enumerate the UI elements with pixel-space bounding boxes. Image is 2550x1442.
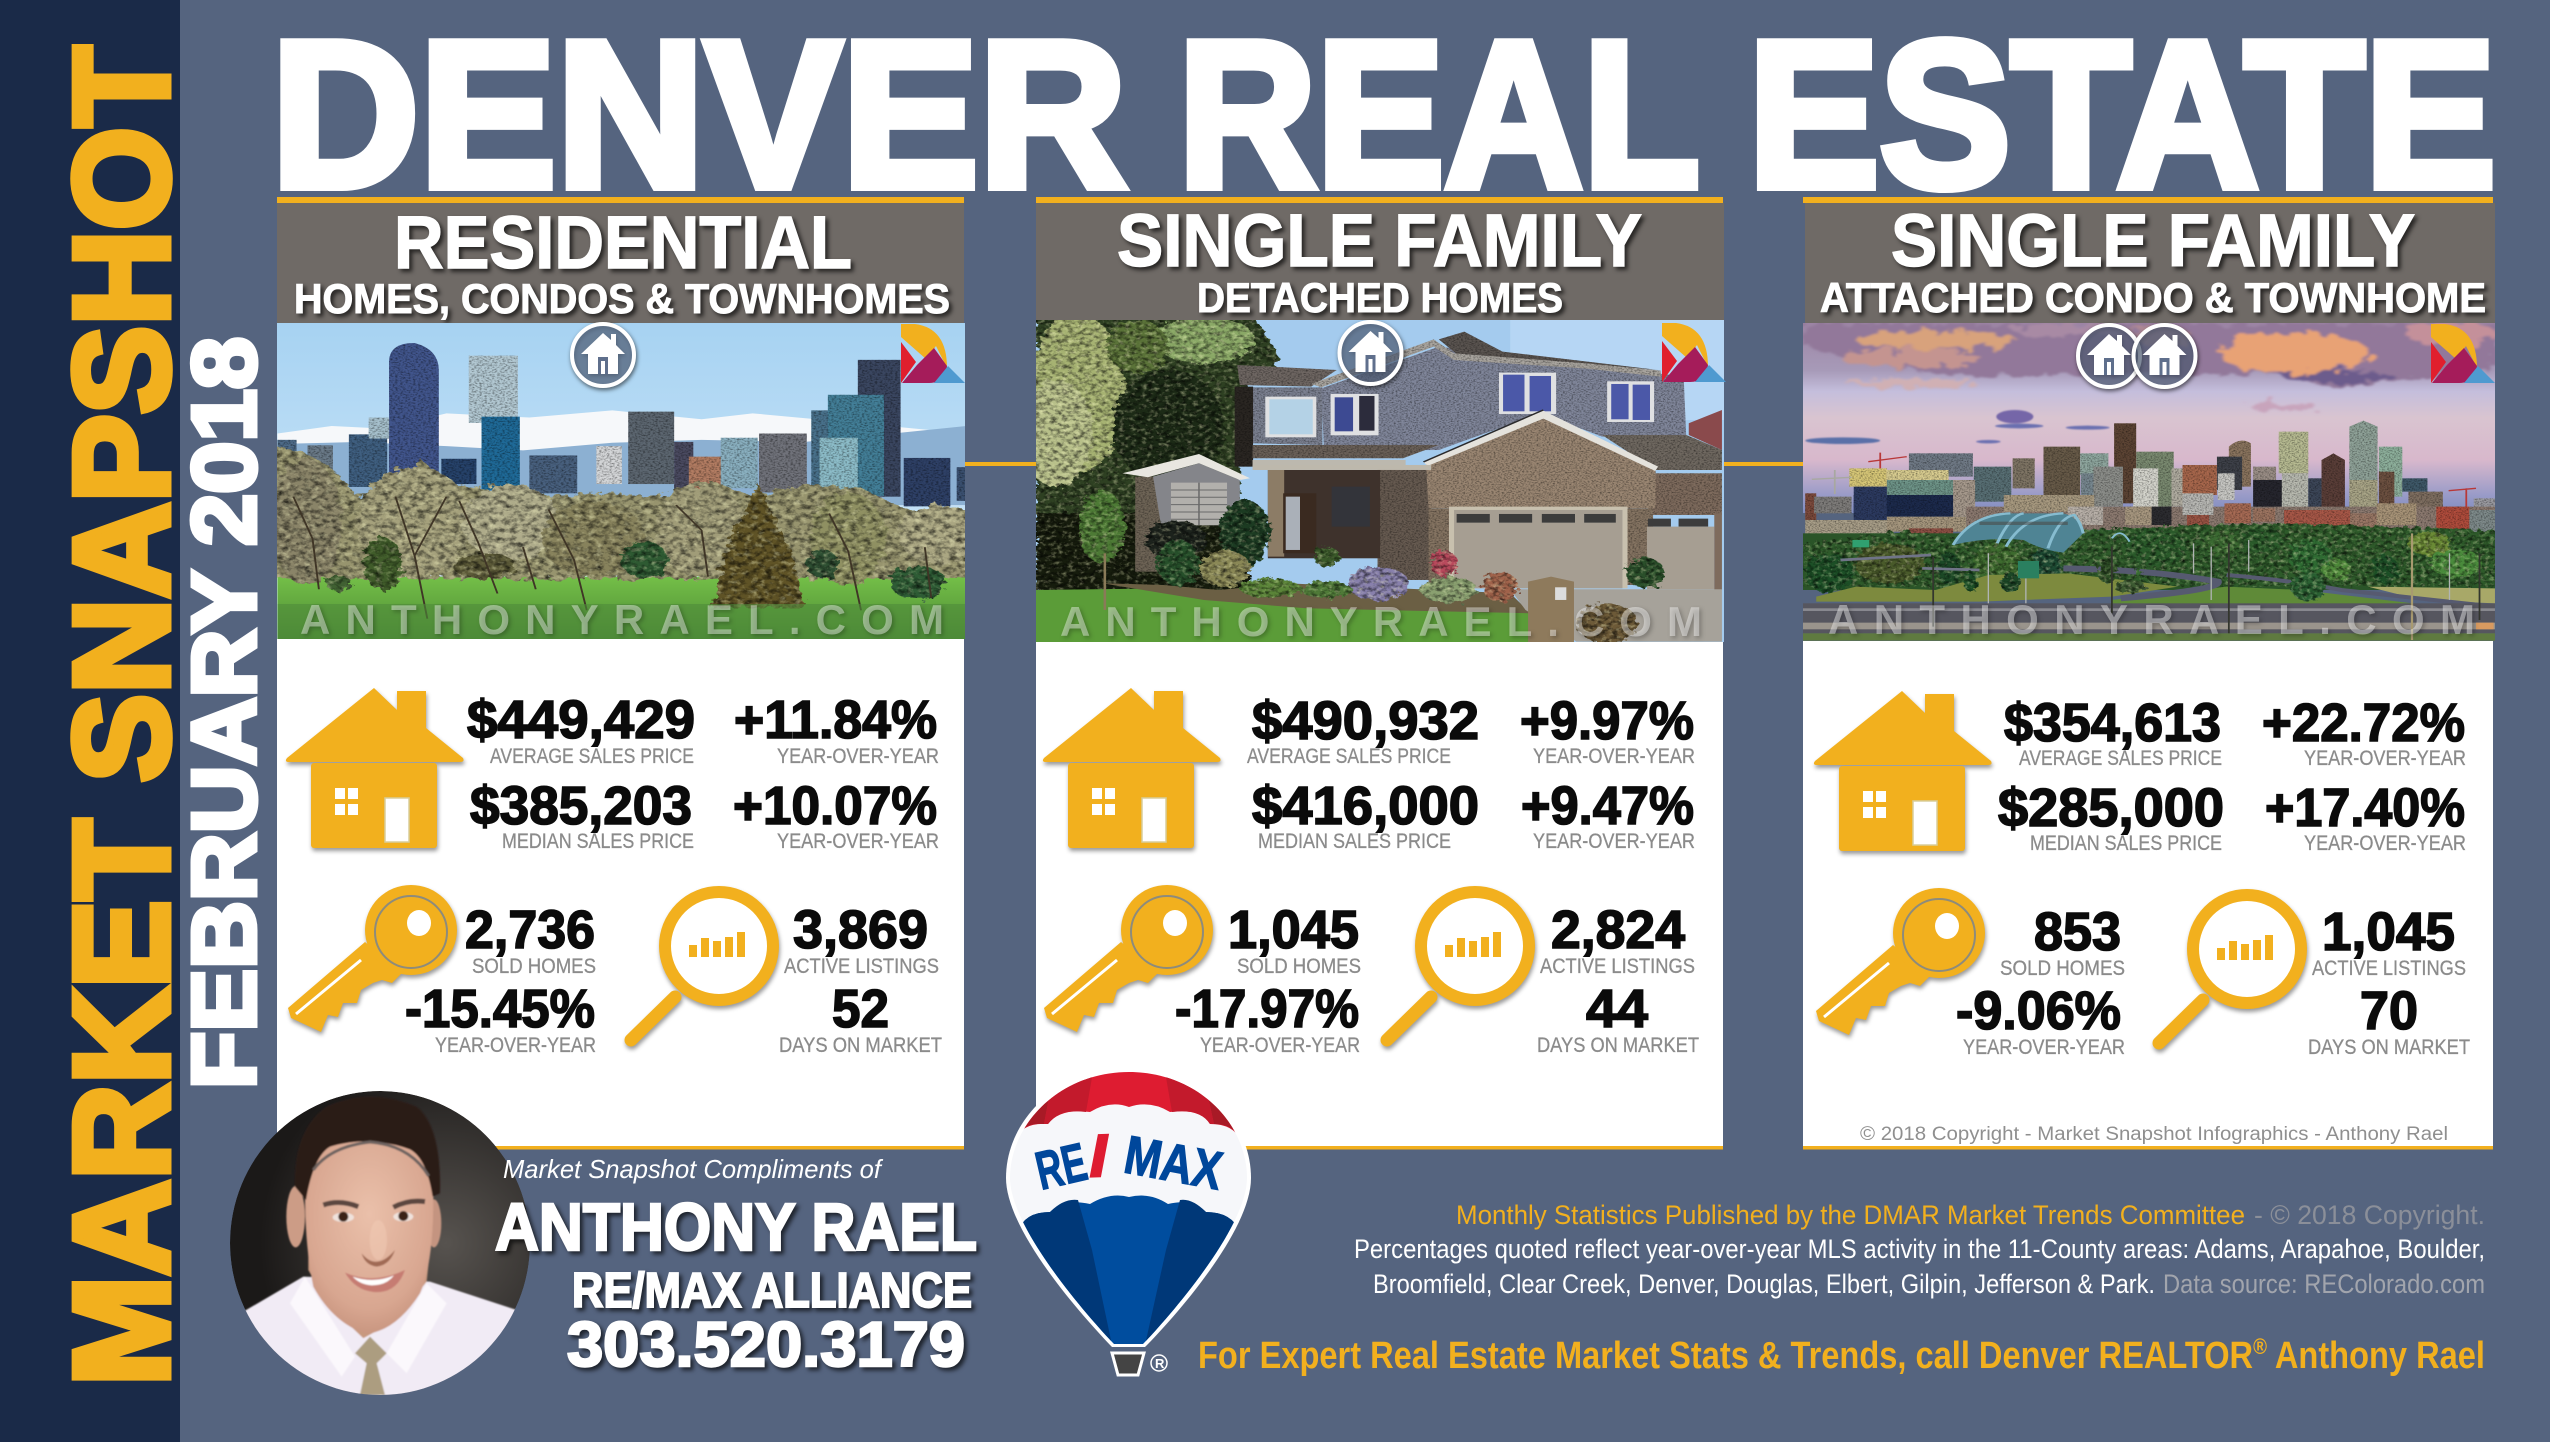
- stat: sold homes: 2,736: [465, 900, 595, 960]
- footer note: source: Monthly Statistics Published by the DMAR Market Trends Committee: [1456, 1200, 2245, 1230]
- brokerage: RE/MAX ALLIANCE: [572, 1264, 972, 1318]
- footer note: source: [1354, 1200, 2485, 1299]
- watermark: ANTHONYRAEL.COM: [1060, 598, 1702, 645]
- stat: sold homes: SOLD HOMES: [472, 954, 596, 978]
- stat: average sales price: $449,429: [467, 690, 695, 750]
- main title: DENVER: [271, 0, 1127, 232]
- stat: active listings: 44: [1586, 979, 1648, 1039]
- balloon wordmark: /: [1089, 1126, 1109, 1187]
- stat: sold homes: -15.45%: [405, 979, 595, 1039]
- photo: detached house: [1020, 313, 1724, 645]
- agent name: ANTHONY RAEL: [495, 1190, 977, 1265]
- stat: sold homes: 1,045: [1228, 900, 1359, 960]
- panel heading: single family attached: ATTACHED CONDO & TOWNHOME: [1820, 274, 2486, 321]
- watermark: ANTHONYRAEL.COM: [1828, 596, 2475, 643]
- stat: sold homes: SOLD HOMES: [1237, 954, 1361, 978]
- stat: median sales price: YEAR-OVER-YEAR: [2304, 831, 2466, 855]
- stat: average sales price: $490,932: [1252, 691, 1479, 751]
- panel: single family detached: [1020, 197, 1726, 1150]
- photo: denver skyline at dusk: [1803, 321, 2498, 643]
- panel heading: single family attached: SINGLE FAMILY: [1891, 199, 2415, 282]
- panel heading: single family detached: DETACHED HOMES: [1197, 274, 1563, 321]
- stat: average sales price: AVERAGE SALES PRICE: [2019, 746, 2222, 770]
- stat: average sales price: [2004, 693, 2466, 770]
- phone number: 303.520.3179: [567, 1310, 965, 1380]
- icon: brand logo: [901, 324, 965, 383]
- panel heading: residential: RESIDENTIAL: [394, 201, 852, 284]
- main title: [271, 0, 2496, 232]
- panel heading: residential: HOMES, CONDOS & TOWNHOMES: [294, 275, 950, 322]
- stat: active listings: 3,869: [793, 900, 928, 960]
- sidebar: [0, 0, 180, 1442]
- stat: average sales price: [467, 690, 939, 768]
- stat: active listings: 1,045: [2322, 902, 2455, 962]
- icon: house: [1043, 688, 1221, 848]
- compliments line: Market Snapshot Compliments of: [503, 1154, 884, 1184]
- agent name: [495, 1190, 977, 1380]
- balloon wordmark: RE: [1030, 1132, 1092, 1202]
- icon: key: [288, 885, 457, 1032]
- panel heading: residential: [294, 201, 950, 322]
- stat: median sales price: MEDIAN SALES PRICE: [1258, 829, 1451, 853]
- stat: active listings: [2308, 902, 2470, 1059]
- icon: key: [1044, 885, 1213, 1032]
- sidebar date: FEBRUARY 2018: [175, 337, 275, 1089]
- icon: two house badges: [2078, 325, 2196, 387]
- icon: magnifier: [1387, 892, 1529, 1040]
- stat: average sales price: YEAR-OVER-YEAR: [1533, 744, 1695, 768]
- stat: active listings: DAYS ON MARKET: [2308, 1035, 2470, 1059]
- stat: median sales price: +10.07%: [733, 776, 937, 836]
- stat: median sales price: MEDIAN SALES PRICE: [2030, 831, 2222, 855]
- stat: median sales price: [1252, 776, 1695, 853]
- stat: median sales price: MEDIAN SALES PRICE: [502, 829, 694, 853]
- stat: sold homes: YEAR-OVER-YEAR: [1963, 1035, 2125, 1059]
- stat: sold homes: SOLD HOMES: [2000, 956, 2125, 980]
- balloon wordmark: MAX: [1120, 1125, 1227, 1202]
- stat: sold homes: [405, 900, 596, 1057]
- panel: single family attached: [1803, 197, 2498, 1150]
- footer note: source: Data source: REColorado.com: [2163, 1269, 2485, 1299]
- stat: median sales price: YEAR-OVER-YEAR: [777, 829, 939, 853]
- stat: sold homes: YEAR-OVER-YEAR: [1200, 1033, 1360, 1057]
- stat: active listings: 2,824: [1551, 900, 1685, 960]
- agent portrait: [230, 1091, 530, 1403]
- photo: denver skyline with park: [268, 320, 976, 644]
- icon: house: [286, 688, 464, 848]
- icon: house badge: [572, 324, 634, 386]
- stat: active listings: 70: [2360, 981, 2418, 1041]
- stat: average sales price: YEAR-OVER-YEAR: [777, 744, 939, 768]
- stat: average sales price: +11.84%: [734, 690, 937, 750]
- icon: house: [1814, 691, 1992, 851]
- stat: median sales price: [470, 776, 939, 853]
- stat: median sales price: +17.40%: [2265, 778, 2465, 838]
- stat: median sales price: YEAR-OVER-YEAR: [1533, 829, 1695, 853]
- main title: REAL: [1178, 0, 1700, 232]
- stat: active listings: DAYS ON MARKET: [779, 1033, 942, 1057]
- stat: median sales price: [1998, 778, 2466, 855]
- stat: active listings: ACTIVE LISTINGS: [1540, 954, 1695, 978]
- stat: sold homes: -17.97%: [1175, 979, 1359, 1039]
- icon: magnifier: [631, 892, 773, 1040]
- stat: average sales price: +9.97%: [1520, 691, 1694, 751]
- panel: residential: [268, 197, 976, 1150]
- stat: active listings: ACTIVE LISTINGS: [2312, 956, 2466, 980]
- icon: magnifier: [2159, 895, 2301, 1043]
- stat: active listings: [1537, 900, 1699, 1057]
- main title: ESTATE: [1748, 0, 2496, 232]
- copyright line: © 2018 Copyright - Market Snapshot Infographics - Anthony Rael: [1860, 1124, 2448, 1145]
- call to action: For Expert Real Estate Market Stats & Trends, call Denver REALTOR: [1198, 1335, 2428, 1377]
- icon: key: [1816, 888, 1985, 1035]
- sidebar title: market snapshot: MARKET SNAPSHOT: [46, 46, 197, 1386]
- stat: active listings: DAYS ON MARKET: [1537, 1033, 1699, 1057]
- icon: house badge: [1340, 322, 1402, 384]
- stat: median sales price: $385,203: [470, 776, 692, 836]
- icon: re/max balloon: R: [1155, 1356, 1165, 1371]
- connector lines: [964, 462, 1803, 466]
- stat: sold homes: -9.06%: [1956, 981, 2121, 1041]
- stat: sold homes: 853: [2034, 902, 2121, 962]
- stat: sold homes: [1956, 902, 2125, 1059]
- stat: average sales price: YEAR-OVER-YEAR: [2304, 746, 2466, 770]
- stat: active listings: ACTIVE LISTINGS: [784, 954, 939, 978]
- stat: sold homes: [1175, 900, 1361, 1057]
- footer note: source: - © 2018 Copyright.: [2254, 1200, 2485, 1230]
- watermark: ANTHONYRAEL.COM: [300, 596, 944, 643]
- panel heading: single family detached: [1117, 199, 1642, 321]
- call to action: ®: [2253, 1334, 2267, 1359]
- panel heading: single family detached: SINGLE FAMILY: [1117, 199, 1642, 282]
- stat: average sales price: [1247, 691, 1695, 768]
- icon: brand logo: [1662, 323, 1726, 382]
- balloon wordmark: [1030, 1125, 1227, 1202]
- stat: median sales price: $416,000: [1252, 776, 1479, 836]
- footer note: source: Broomfield, Clear Creek, Denver, Douglas, Elbert, Gilpin, Jefferson & Park.: [1373, 1269, 2155, 1299]
- stat: median sales price: +9.47%: [1521, 776, 1694, 836]
- stat: average sales price: AVERAGE SALES PRICE: [490, 744, 694, 768]
- stat: active listings: [779, 900, 942, 1057]
- stat: average sales price: +22.72%: [2262, 693, 2465, 753]
- stat: average sales price: AVERAGE SALES PRICE: [1247, 744, 1451, 768]
- stat: median sales price: $285,000: [1998, 778, 2224, 838]
- stat: average sales price: $354,613: [2004, 693, 2221, 753]
- panel heading: single family attached: [1820, 199, 2486, 321]
- call to action: Anthony Rael: [2267, 1335, 2485, 1377]
- icon: brand logo: [2431, 324, 2495, 383]
- stat: active listings: 52: [832, 979, 889, 1039]
- icon: re/max balloon: [1000, 1060, 1260, 1375]
- stat: sold homes: YEAR-OVER-YEAR: [435, 1033, 596, 1057]
